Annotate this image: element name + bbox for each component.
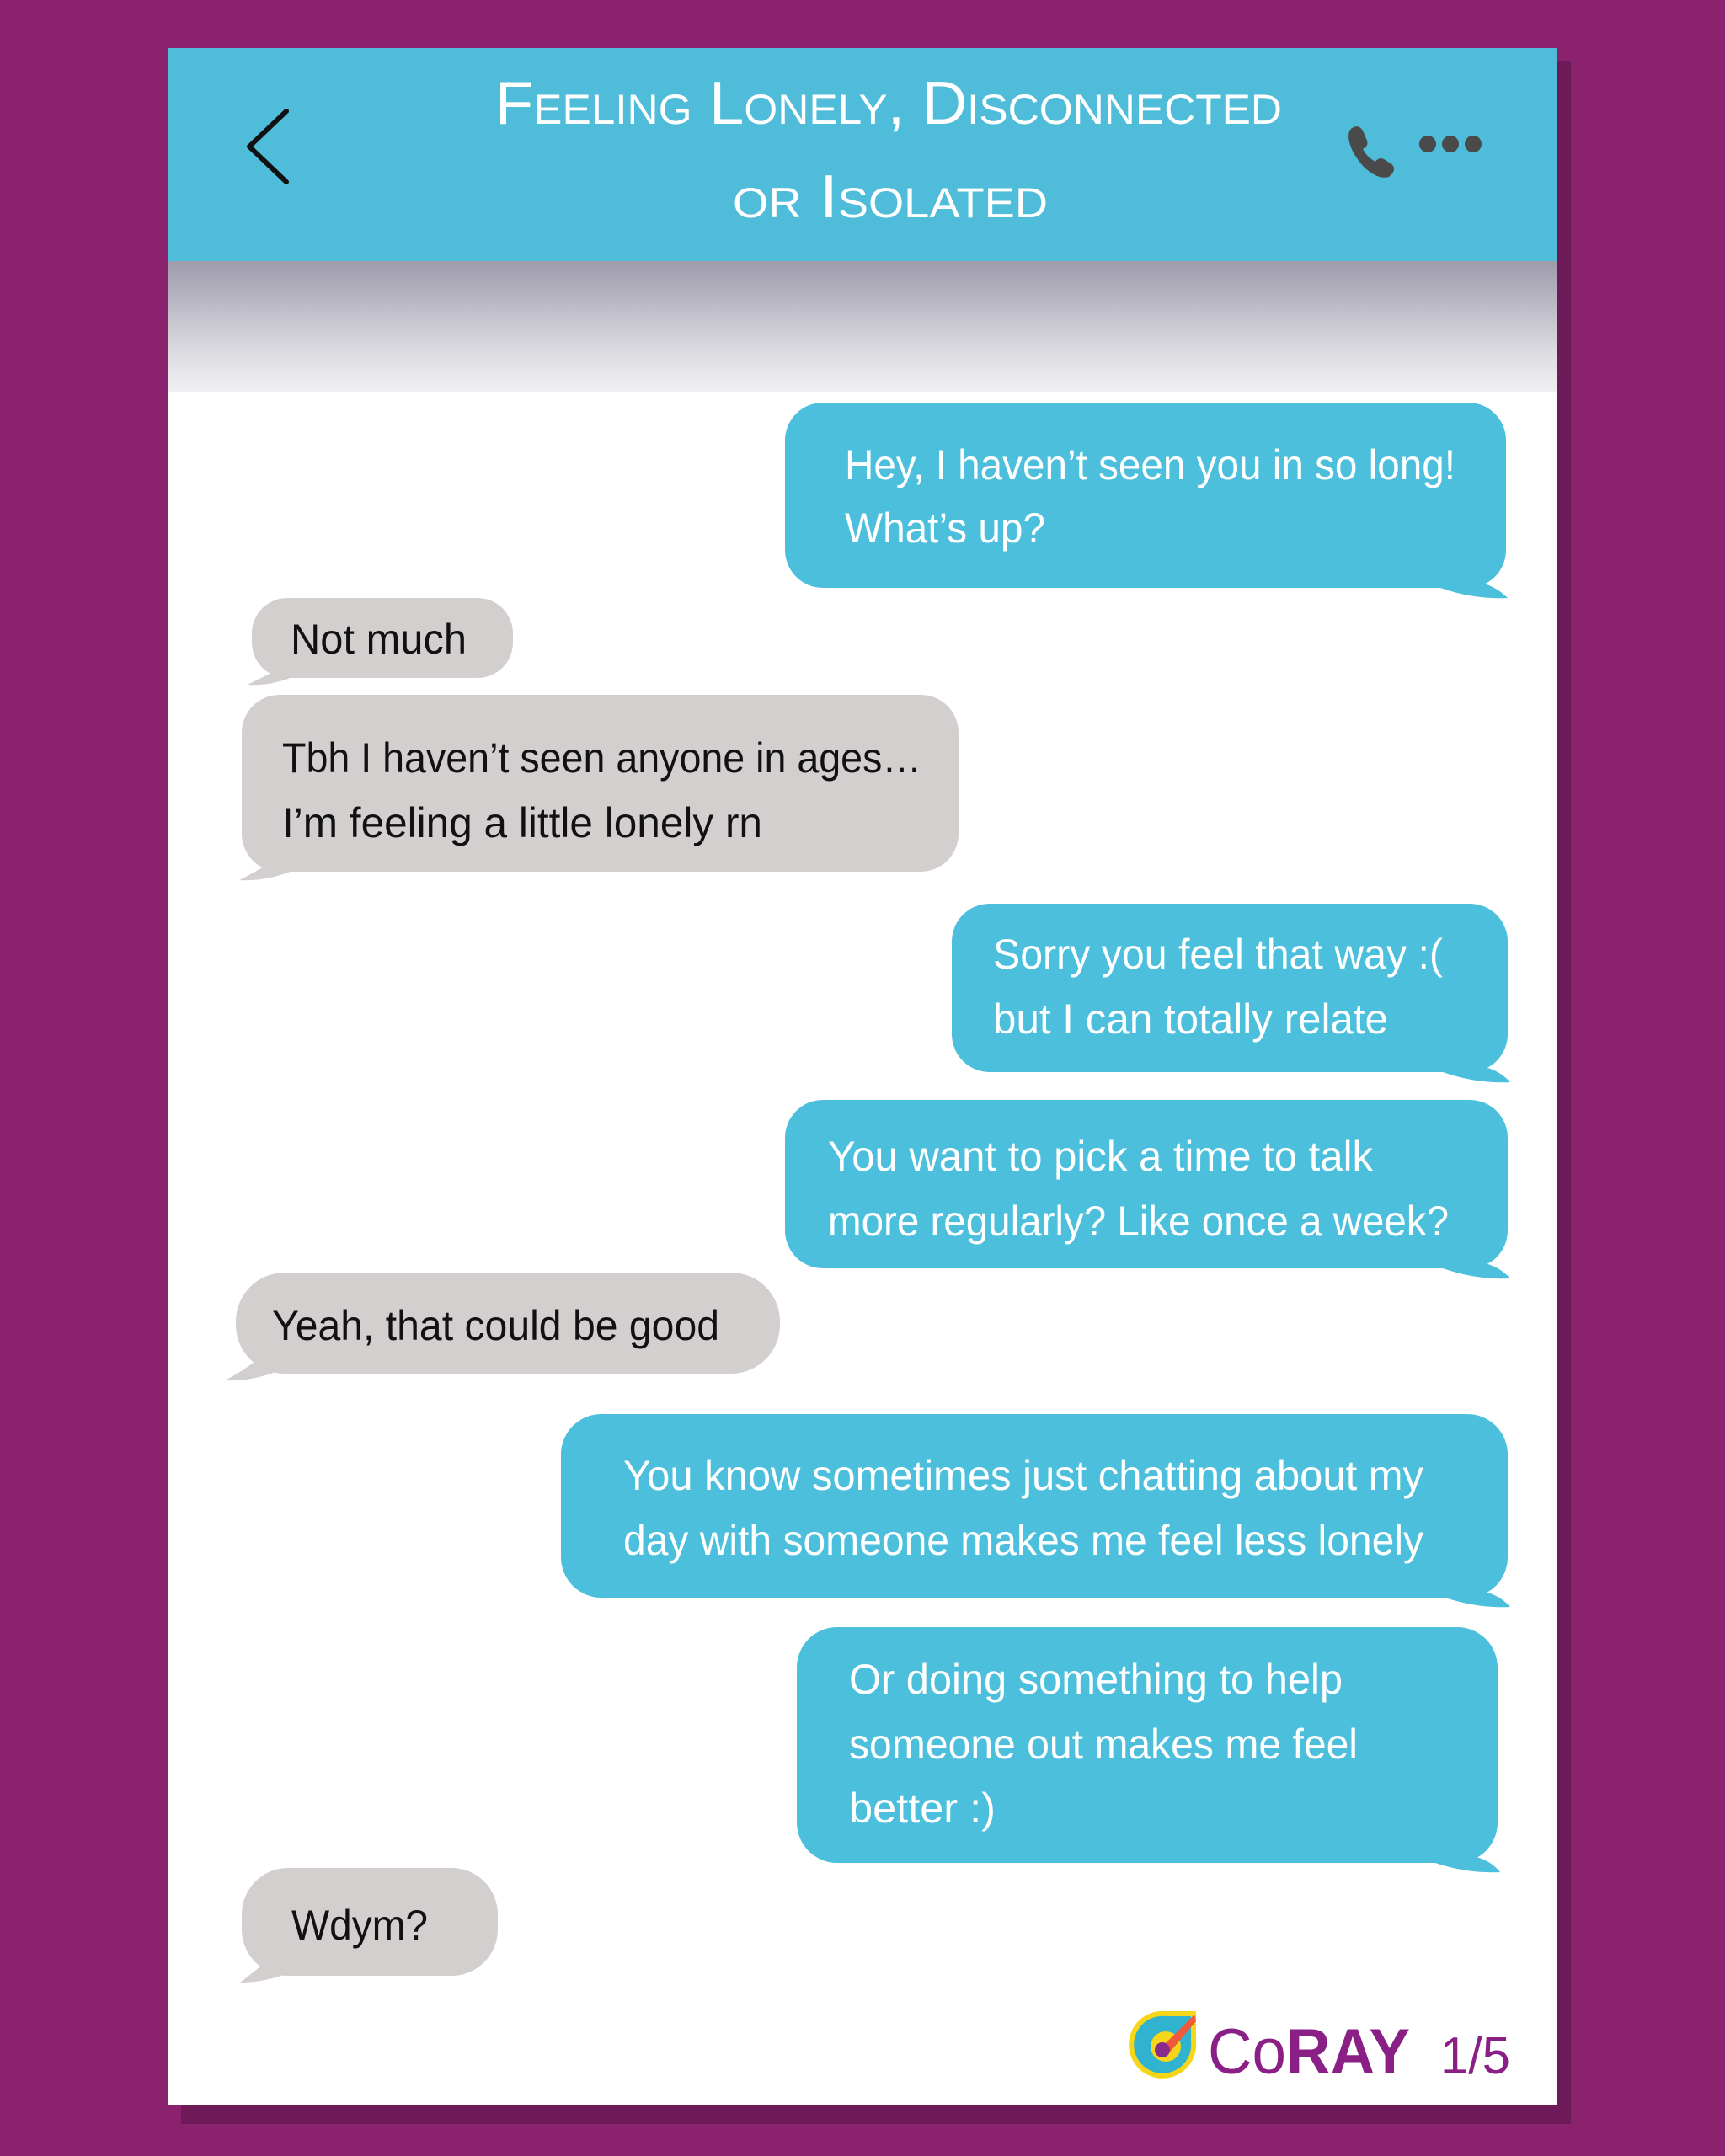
logo: CoRAY: CoRAY <box>1208 2016 1410 2088</box>
bubble 3 (grey) <box>239 695 959 880</box>
bubble 9 (grey) <box>240 1868 498 1983</box>
bubble 9 (grey): Wdym? <box>291 1902 428 1949</box>
title: Feeling Lonely, Disconnected <box>495 70 1282 137</box>
bubble 7 (blue): day with someone makes me feel less lonely <box>623 1517 1423 1564</box>
logo: CoRAY <box>1129 2011 1510 2088</box>
logo: CoRAY: 1/5 <box>1440 2027 1510 2085</box>
bubble 5 (blue): You want to pick a time to talk <box>828 1133 1374 1180</box>
bubble 1 (blue) <box>785 403 1508 598</box>
grey band under header <box>168 261 1557 392</box>
bubble 5 (blue) <box>785 1100 1510 1278</box>
icon: back arrow <box>249 111 286 182</box>
title <box>495 70 1282 231</box>
icon: phone and menu dots <box>1348 126 1482 178</box>
bubble 4 (blue): Sorry you feel that way :( <box>993 931 1443 978</box>
bubble 6 (grey) <box>225 1273 780 1380</box>
panel: phone screen <box>168 48 1557 2105</box>
bubble 8 (blue): better :) <box>849 1785 996 1832</box>
bubble 4 (blue): but I can totally relate <box>993 995 1388 1043</box>
bubble 1 (blue): What’s up? <box>845 504 1045 552</box>
icon: CoRAY logo mark <box>1129 2011 1196 2079</box>
bubble 8 (blue): Or doing something to help <box>849 1656 1343 1703</box>
bubble 4 (blue) <box>952 904 1510 1082</box>
bubble 1 (blue): Hey, I haven’t seen you in so long! <box>845 441 1455 488</box>
bubble 5 (blue): more regularly? Like once a week? <box>828 1198 1449 1245</box>
bubble 3 (grey): I’m feeling a little lonely rn <box>282 799 762 846</box>
bubble 8 (blue) <box>797 1627 1500 1872</box>
bubble 2 (grey) <box>248 598 513 685</box>
bubble 7 (blue) <box>561 1414 1510 1607</box>
bubble 2 (grey): Not much <box>291 616 467 663</box>
bubble 3 (grey): Tbh I haven’t seen anyone in ages… <box>282 734 921 782</box>
panel shadow <box>181 61 1571 2124</box>
title: or Isolated <box>733 163 1048 231</box>
bubble 6 (grey): Yeah, that could be good <box>272 1302 719 1349</box>
bubble 8 (blue): someone out makes me feel <box>849 1721 1358 1768</box>
bubble 7 (blue): You know sometimes just chatting about my <box>623 1452 1423 1499</box>
header bar <box>168 48 1557 263</box>
